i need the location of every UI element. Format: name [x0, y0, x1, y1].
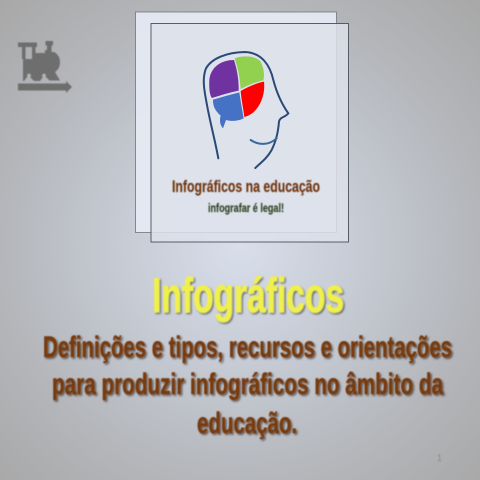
panel: logo card	[136, 12, 348, 242]
icon: locomotive on arrow	[18, 41, 72, 93]
subtitle line 3: educação.	[197, 407, 297, 440]
back card	[136, 12, 336, 232]
logo tagline: infografar é legal!	[208, 203, 284, 215]
subtitle	[43, 331, 452, 440]
page number: 1	[437, 453, 442, 463]
brain: blue	[213, 92, 244, 128]
brain: purple	[209, 60, 239, 98]
logo title: Infográficos na educação	[172, 177, 320, 196]
title: Infográficos	[152, 269, 344, 323]
brain: green	[235, 56, 264, 89]
jaw line	[251, 138, 277, 144]
brain: red	[241, 82, 264, 117]
logo: head with coloured brain	[204, 52, 288, 168]
front card	[151, 24, 348, 242]
head outline	[204, 52, 288, 168]
